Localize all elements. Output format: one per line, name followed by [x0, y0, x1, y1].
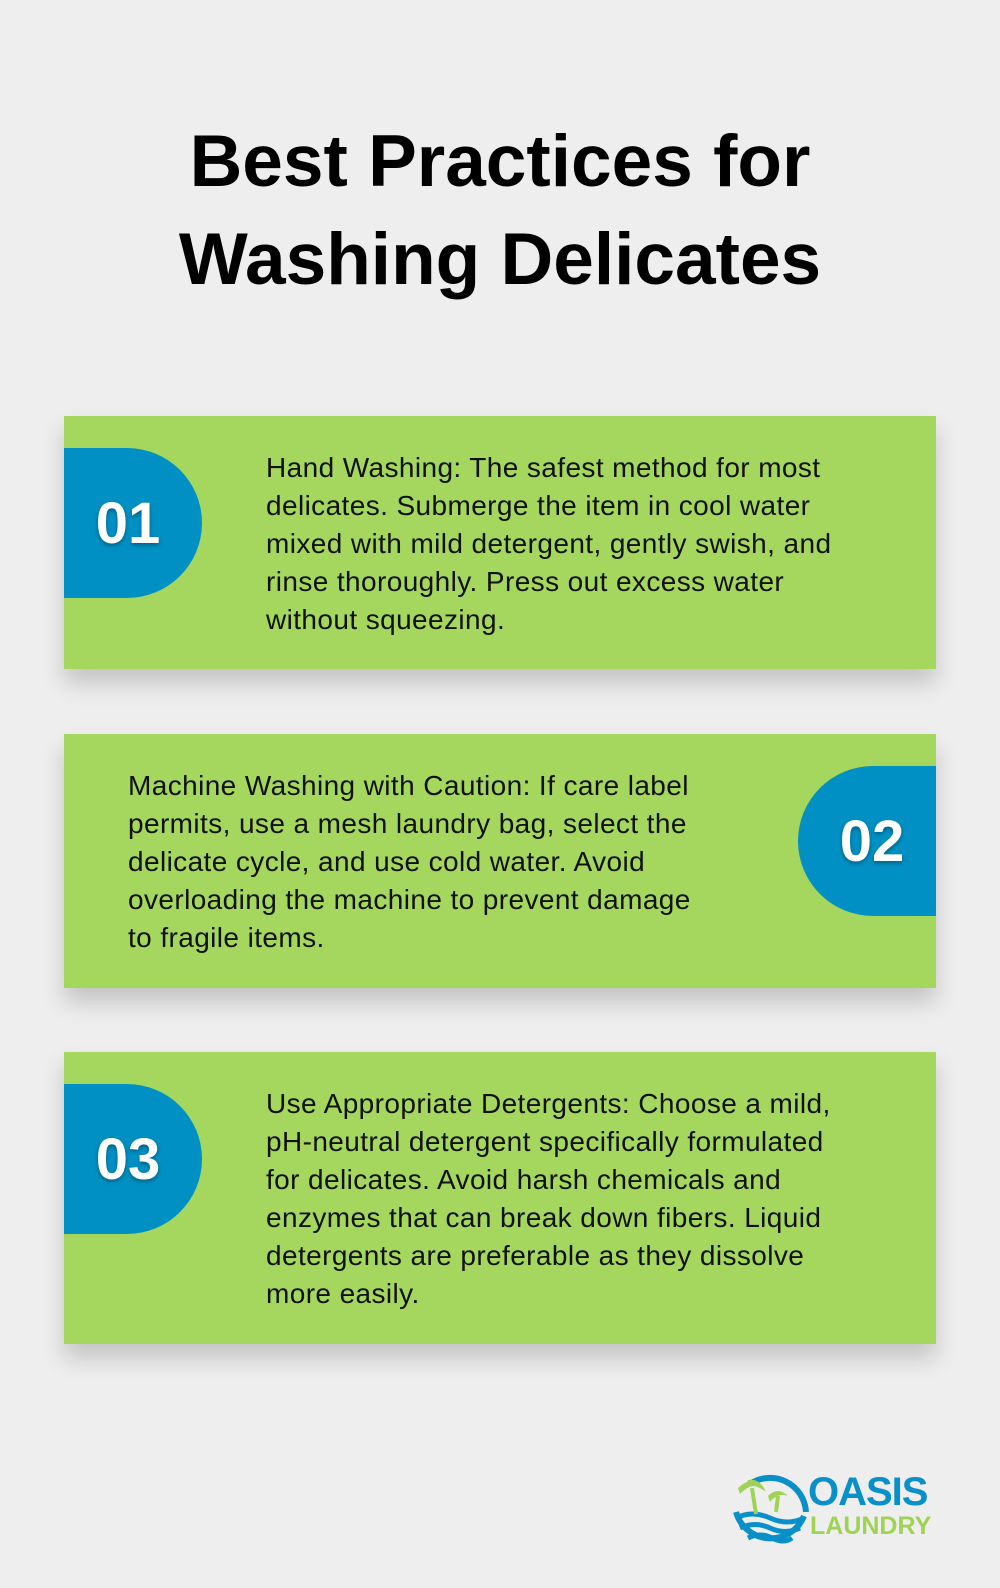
badge 02: 02: [840, 808, 904, 874]
text: machine washing: Machine Washing with Caution: If care label: [128, 770, 689, 801]
text: machine washing: overloading the machine to prevent damage: [128, 884, 691, 915]
panel: hand washing: [64, 416, 936, 669]
text: hand washing: Hand Washing: The safest method for most: [266, 452, 820, 483]
text: machine washing: [128, 770, 691, 953]
text: machine washing: to fragile items.: [128, 922, 325, 953]
badge 03: [64, 1084, 202, 1234]
title: Best Practices for: [190, 121, 810, 202]
text: detergents: for delicates. Avoid harsh chemicals and: [266, 1164, 781, 1195]
text: detergents: more easily.: [266, 1278, 420, 1309]
logo: LAUNDRY: [810, 1512, 931, 1540]
text: detergents: [266, 1088, 831, 1309]
logo text: OASIS: [808, 1470, 927, 1514]
panel: detergents: [64, 1052, 936, 1344]
text: hand washing: without squeezing.: [266, 604, 505, 635]
logo: [733, 1470, 931, 1544]
badge 01: [64, 448, 202, 598]
logo icon: [733, 1474, 809, 1544]
badge 01: 01: [96, 490, 160, 556]
text: detergents: detergents are preferable as they dissolve: [266, 1240, 804, 1271]
text: detergents: Use Appropriate Detergents: Choose a mild,: [266, 1088, 831, 1119]
title: Washing Delicates: [179, 219, 821, 300]
badge 02: [798, 766, 936, 916]
text: detergents: pH-neutral detergent specifically formulated: [266, 1126, 824, 1157]
text: hand washing: [266, 452, 831, 635]
panel: machine washing: [64, 734, 936, 988]
text: hand washing: mixed with mild detergent, gently swish, and: [266, 528, 831, 559]
badge 03: 03: [96, 1126, 160, 1192]
text: detergents: enzymes that can break down fibers. Liquid: [266, 1202, 821, 1233]
text: hand washing: rinse thoroughly. Press out excess water: [266, 566, 784, 597]
text: hand washing: delicates. Submerge the item in cool water: [266, 490, 810, 521]
text: machine washing: permits, use a mesh laundry bag, select the: [128, 808, 687, 839]
title: [179, 121, 821, 300]
text: machine washing: delicate cycle, and use cold water. Avoid: [128, 846, 645, 877]
